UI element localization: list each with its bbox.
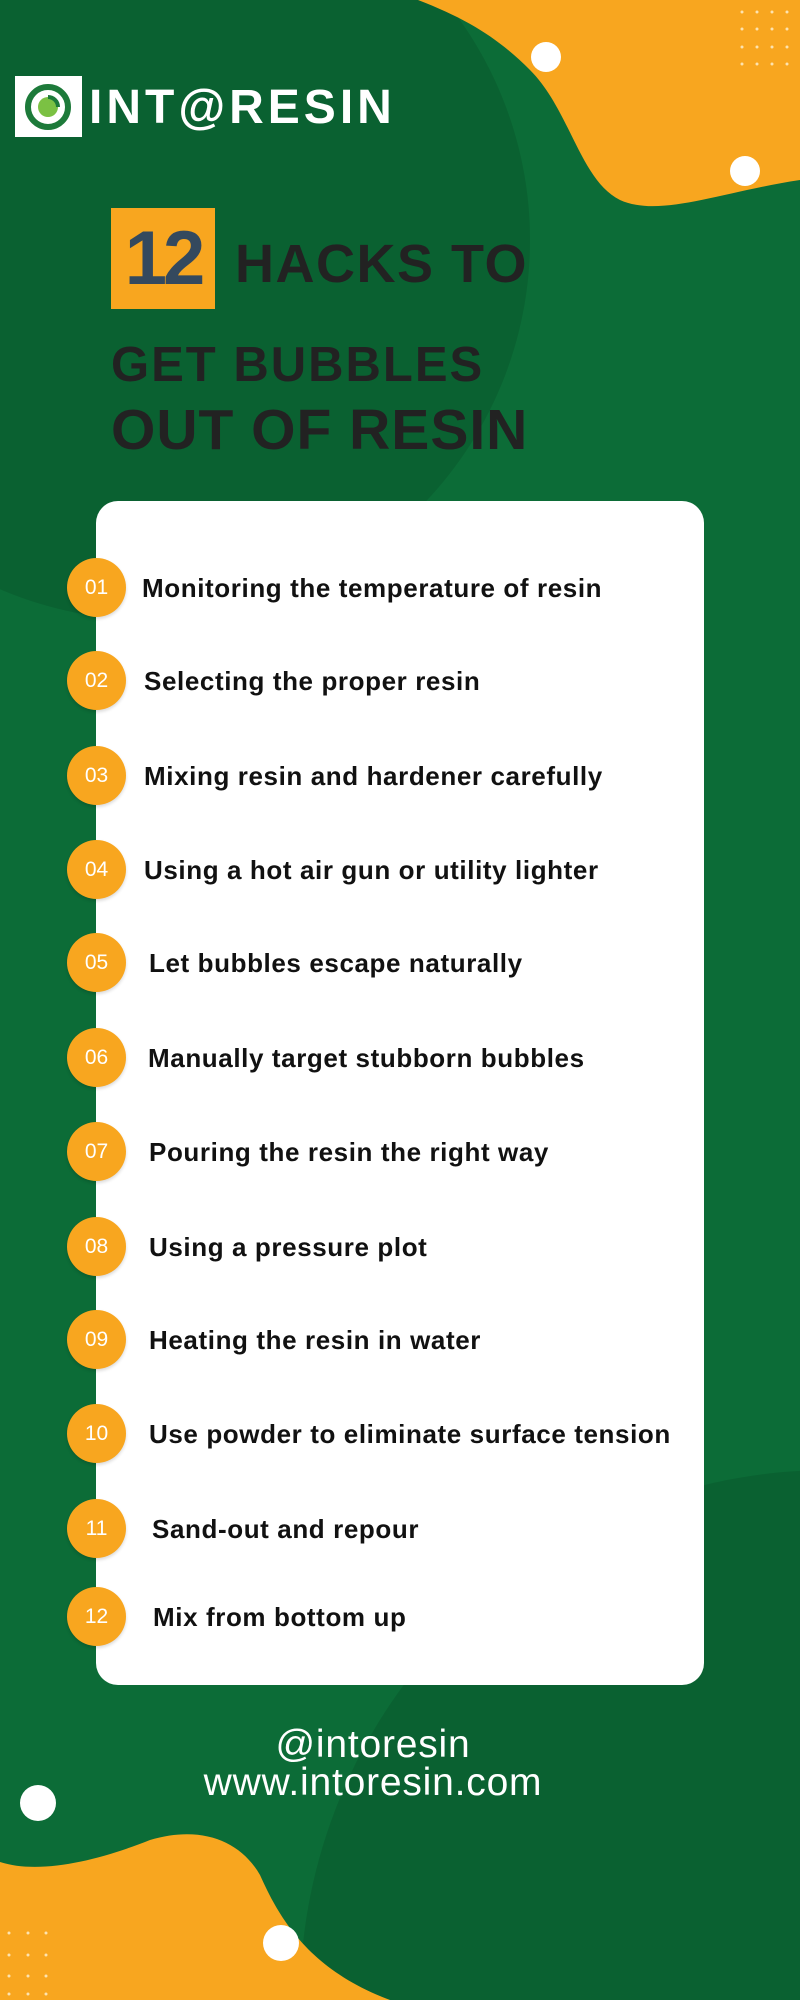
list items: [67, 558, 671, 1649]
item 02: Selecting the proper resin: [144, 666, 480, 696]
logo text: INT@RESIN: [89, 81, 396, 134]
heading line 2: GET BUBBLES: [111, 338, 484, 392]
footer: social and website: [204, 1723, 542, 1804]
item 08: [67, 1217, 427, 1279]
item 08: Using a pressure plot: [149, 1232, 427, 1262]
item 06: 06: [85, 1046, 108, 1069]
item 08: 08: [85, 1235, 108, 1258]
item 10: Use powder to eliminate surface tension: [149, 1419, 671, 1449]
badge: 12: 12: [125, 216, 201, 301]
item 04: Using a hot air gun or utility lighter: [144, 855, 599, 885]
item 04: [67, 840, 599, 902]
item 06: Manually target stubborn bubbles: [148, 1043, 585, 1073]
item 04: 04: [85, 858, 108, 881]
item 01: Monitoring the temperature of resin: [142, 573, 602, 603]
item 12: 12: [85, 1605, 108, 1628]
item 03: [67, 746, 603, 808]
item 03: Mixing resin and hardener carefully: [144, 761, 603, 791]
item 10: 10: [85, 1422, 108, 1445]
item 05: [67, 933, 523, 995]
item 09: [67, 1310, 481, 1372]
title: [111, 208, 528, 462]
footer: social and website: @intoresin: [275, 1723, 470, 1766]
panel: hacks list: [96, 501, 704, 1685]
heading line 3: OUT OF RESIN: [111, 398, 528, 462]
item 09: 09: [85, 1328, 108, 1351]
item 10: [67, 1404, 671, 1466]
item 06: [67, 1028, 585, 1090]
item 05: 05: [85, 951, 108, 974]
logo: [15, 76, 396, 137]
item 01: 01: [85, 576, 108, 599]
icon: logo swirl: [15, 76, 82, 137]
item 07: Pouring the resin the right way: [149, 1137, 549, 1167]
item 05: Let bubbles escape naturally: [149, 948, 523, 978]
badge: 12: [111, 208, 215, 309]
heading line 1: HACKS TO: [235, 234, 528, 294]
item 03: 03: [85, 764, 108, 787]
item 07: [67, 1122, 549, 1184]
item 12: Mix from bottom up: [153, 1602, 406, 1632]
item 01: [67, 558, 602, 620]
item 09: Heating the resin in water: [149, 1325, 481, 1355]
item 07: 07: [85, 1140, 108, 1163]
item 02: [67, 651, 480, 713]
footer: social and website: www.intoresin.com: [204, 1761, 542, 1804]
item 11: [67, 1499, 419, 1561]
item 12: [67, 1587, 406, 1649]
item 11: Sand-out and repour: [152, 1514, 419, 1544]
item 11: 11: [86, 1517, 107, 1540]
item 02: 02: [85, 669, 108, 692]
